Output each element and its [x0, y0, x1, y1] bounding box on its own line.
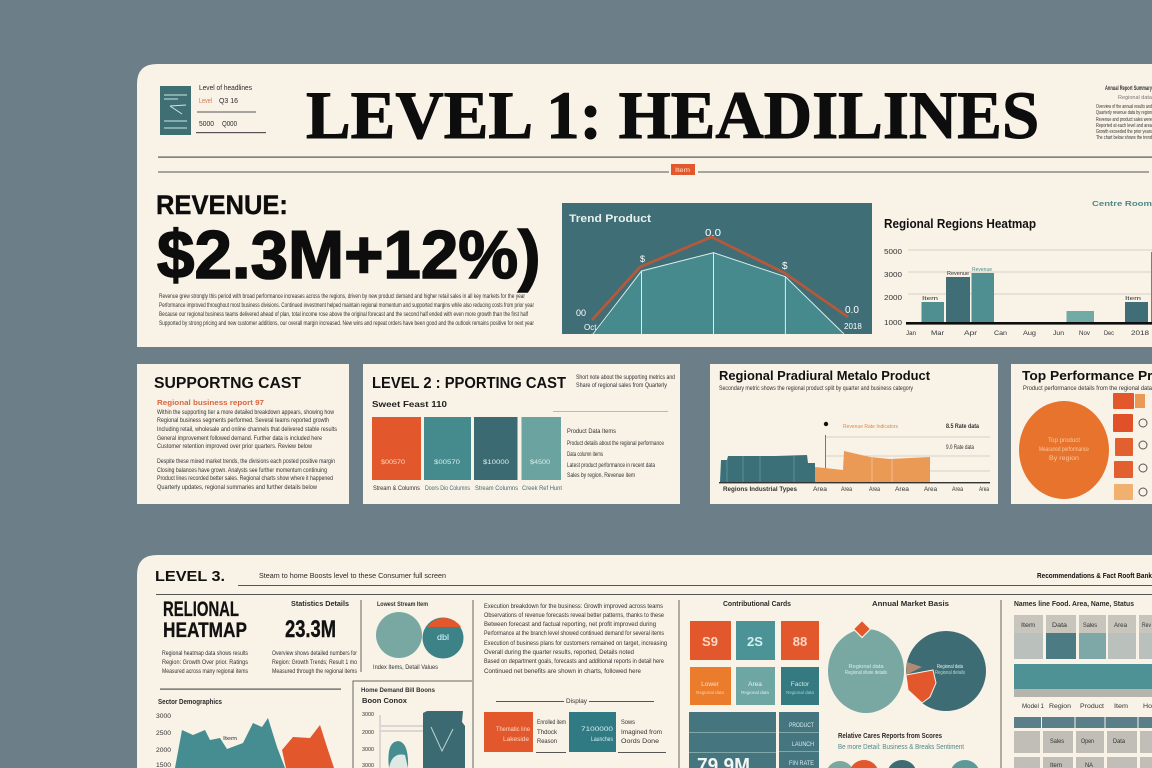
body copy [157, 409, 337, 491]
heat table: Model 1 [1022, 703, 1045, 710]
panel: level 3 [137, 555, 1152, 768]
chart: circles [373, 601, 464, 671]
body copy: Within the supporting tier a more detailed breakdown appears, showing how [157, 409, 334, 416]
subheading: Sweet Feast 110 [372, 399, 447, 409]
chart: circles: Index Items, Detail Values [373, 664, 438, 671]
relative cares heading and circles: Relative Cares Reports from Scores [838, 733, 942, 740]
relative cares heading and circles [826, 733, 980, 768]
chart: regional bars: 3000 [884, 272, 902, 279]
note: Short note about the supporting metrics and [576, 374, 675, 381]
side list: Latest product performance in recent data [567, 462, 655, 469]
heat table: Open [1081, 738, 1094, 745]
chart: trend product: 00 [576, 308, 586, 318]
colour swatches [372, 417, 562, 492]
chart: inset box: 3000 [362, 747, 374, 753]
chart: regional bars: Apr [964, 330, 977, 337]
chart: inset box: Boon Conox [362, 698, 407, 705]
display strip: 7100000 [581, 726, 613, 733]
chart: annual circles: Regional data [848, 664, 884, 670]
heading: SUPPORTNG CAST [154, 375, 302, 392]
chart: regional bars [884, 199, 1152, 337]
chart: orange circle [1019, 401, 1109, 499]
chart: regional bars: Jun [1053, 330, 1065, 337]
masthead details: 5000 [199, 121, 214, 128]
masthead details [196, 85, 266, 133]
display strip: Thdock [537, 729, 558, 736]
chart: regional bars: 2000 [884, 295, 902, 302]
chart: regional bars: Mar [931, 330, 944, 337]
chart: area regions: Sector Demographics [158, 699, 222, 706]
chart: area comparison: Area [924, 486, 938, 493]
colour swatches: $00570 [381, 459, 405, 466]
side note top right [1096, 85, 1152, 141]
chart: area comparison: Area [813, 486, 828, 493]
chart: annual circles: Regional details [935, 670, 965, 676]
metric tiles: FIN RATE [789, 761, 814, 767]
chart: regional bars: Item [922, 296, 938, 302]
display strip: Imagined from [621, 729, 662, 736]
side list: Data column items [567, 451, 603, 458]
chart: trend product: $ [640, 254, 645, 264]
revenue description: Supported by strong pricing and new customer additions, our overall margin increased. New wins and repeat orders have been good and the outlook remains positive for next year [159, 320, 534, 327]
metric tiles: Factor [791, 681, 810, 688]
chart: regional bars: Regional Regions Heatmap [884, 217, 1036, 231]
chart: area comparison: Area [895, 486, 910, 493]
metric tiles: LAUNCH [792, 742, 814, 748]
display strip: Reason [537, 738, 558, 745]
body copy: Quarterly updates, regional summaries and further details below [157, 484, 317, 491]
body copy: Customer retention improved over prior quarters. Review below [157, 443, 312, 450]
metric tiles: Lower [701, 681, 720, 688]
middle text block: Performance at the branch level showed continued demand for several items [484, 630, 664, 637]
chart: area comparison: Area [952, 486, 963, 493]
metric tiles: Contributional Cards [723, 601, 791, 608]
side list: Product Data Items [567, 428, 616, 435]
chart: trend product: 0.0 [845, 305, 859, 316]
middle text block: Based on department goals, forecasts and additional reports in detail here [484, 658, 664, 665]
chart: trend product: 2018 [844, 322, 862, 331]
chart: regional bars: Revenue [947, 271, 969, 277]
chart: inset box: 2000 [362, 730, 374, 736]
chart: regional bars: Can [994, 330, 1008, 337]
header rules and orange tag [158, 156, 1152, 175]
heat table: Product [1080, 703, 1104, 710]
small text columns: Overview shows detailed numbers for [272, 650, 357, 657]
small text columns: Measured across many regional items [162, 668, 248, 675]
chart: regional bars: Centre Room [1092, 199, 1152, 208]
statistic [285, 601, 349, 643]
statistic: 23.3M [285, 616, 336, 643]
body copy: Regional business segments performed. Several teams reported growth [157, 417, 329, 424]
note [576, 374, 675, 389]
heat table: Sales [1083, 622, 1097, 629]
side note top right: Regional data [1118, 95, 1152, 101]
metric tiles: Area [748, 681, 762, 688]
metric tiles: 2S [747, 634, 763, 649]
heading: Regional Pradiural Metalo Product [719, 369, 931, 383]
heat table: Ho [1143, 703, 1152, 710]
middle text block: Execution of business plans for customers remained on target, increasing [484, 640, 668, 647]
panel: regional metals product [710, 364, 998, 504]
revenue label: REVENUE: [156, 189, 288, 220]
side list: Product details about the regional performance [567, 440, 664, 447]
masthead details: Level [199, 98, 212, 105]
chart: area comparison: Area [841, 486, 852, 493]
regional heatmap heading [163, 598, 247, 642]
chart: inset box [353, 681, 472, 768]
chart: area regions: 2500 [156, 730, 172, 737]
body copy: Including retail, wholesale and online channels that delivered stable results [157, 426, 337, 433]
display strip: Lakeside [503, 736, 529, 743]
chart: inset box: Home Demand Bill Boons [361, 687, 436, 694]
chart: area regions [156, 688, 341, 768]
middle text block: Observations of revenue forecasts reveal better patterns, thanks to these [484, 612, 665, 619]
chart: area regions: 2000 [156, 747, 172, 754]
middle text block: Continued net benefits are shown in charts, followed here [484, 668, 642, 675]
chart: circles: Lowest Stream Item [377, 601, 428, 608]
metric tiles: Regional data [786, 690, 814, 695]
chart: area comparison: 9.0 Rate data [946, 444, 974, 451]
display strip: Thematic line [496, 726, 530, 733]
heading: LEVEL 2 : PPORTING CAST [372, 375, 567, 392]
panel: level 1 headlines [137, 64, 1152, 347]
chart: regional bars: Revenue [972, 267, 992, 273]
small text columns [162, 650, 357, 675]
side list [567, 428, 664, 479]
chart: area comparison [719, 422, 990, 493]
note: Share of regional sales from Quarterly [576, 382, 668, 389]
heat table: Item [1021, 622, 1035, 629]
chart: orange circle: Measured performance [1039, 447, 1090, 453]
chart: regional bars: 5000 [884, 249, 902, 256]
small text columns: Region: Growth Trends; Result 1 mo [272, 659, 357, 666]
display strip: Sows [621, 719, 635, 726]
colour swatches: $4500 [530, 459, 550, 466]
chart: regional bars: Item [1125, 296, 1141, 302]
chart: annual circles: Regional data [937, 664, 963, 670]
chart: regional bars: 1000 [884, 320, 902, 327]
chart: orange circle: Top product [1048, 438, 1080, 444]
chart: trend product: Trend Product [569, 213, 651, 225]
revenue description: Revenue grew strongly this period with broad performance increases across the regions, driven by new product demand and higher retail sales in all key markets for the year [159, 293, 525, 300]
chart: regional bars: Nov [1079, 330, 1091, 337]
section heading: LEVEL 3. [155, 568, 225, 585]
display strip [484, 698, 666, 752]
colour swatches: Stream & Columns [373, 485, 420, 492]
metric tiles: 88 [793, 634, 807, 649]
chart: trend product [562, 203, 872, 334]
middle text block: Overall during the quarter results, reported, Details noted [484, 649, 635, 656]
chart: circles: dbl [437, 633, 449, 642]
heat table: Data [1052, 622, 1068, 629]
icon: teal document [160, 86, 191, 135]
chart: area comparison: Regions Industrial Types [723, 486, 798, 493]
subheading: Secondary metric shows the regional product split by quarter and business category [719, 385, 914, 392]
chart: annual circles: Annual Market Basis [872, 601, 949, 608]
middle text block: Execution breakdown for the business: Growth improved across teams [484, 603, 663, 610]
chart: trend product: Oct [584, 323, 597, 332]
chart: area comparison: Area [869, 486, 880, 493]
heat table: Names line Food. Area, Name, Status [1014, 601, 1134, 608]
display strip: Oords Done [621, 738, 660, 745]
masthead details: Level of headlines [199, 85, 252, 92]
chart: trend product: $ [782, 261, 788, 272]
title: LEVEL 1: HEADILINES [306, 78, 1039, 153]
heat table: Area [1114, 622, 1128, 629]
middle text block [484, 603, 668, 675]
side list: Sales by region, Revenue item [567, 472, 635, 479]
chart: area comparison: Revenue Rate Indicators [843, 424, 898, 430]
body copy: Closing balances have grown. Analysts see further momentum continuing [157, 467, 327, 474]
chart: orange circle: By region [1049, 456, 1079, 462]
colour swatches: $00570 [434, 459, 460, 466]
display strip: Display [566, 698, 588, 705]
revenue description: Performance improved throughout most business divisions. Continued investment helped maintain regional momentum and supported margins while also reducing costs from prior year [159, 302, 534, 309]
small text columns: Region: Growth Over prior. Ratings [162, 659, 248, 666]
chart: inset box: 3000 [362, 712, 374, 718]
metric tiles: Regional data [741, 690, 769, 695]
panel: level 2 supporting cast [363, 364, 680, 504]
heat table [1014, 601, 1152, 768]
body copy: Despite these mixed market trends, the divisions each posted positive margin [157, 458, 335, 465]
heat table: Item [1114, 703, 1128, 710]
revenue description [159, 293, 534, 327]
heat table: Sales [1050, 738, 1064, 745]
display strip: Enrolled item [537, 719, 566, 726]
statistic: Statistics Details [291, 601, 349, 608]
metric tiles: S9 [702, 634, 718, 649]
header rules and orange tag: Item [675, 168, 690, 174]
body copy: General improvement followed demand. Further data is included here [157, 435, 322, 442]
chart: area regions: 3000 [156, 713, 172, 720]
chart: area regions: Item [223, 736, 237, 742]
colour swatches: Stream Columns [475, 485, 518, 492]
small text columns: Regional heatmap data shows results [162, 650, 248, 657]
colour swatches: $10000 [483, 459, 509, 466]
masthead details: Q000 [222, 121, 237, 128]
chart: annual circles [828, 601, 986, 713]
orange subheading: Regional business report 97 [157, 398, 264, 407]
heat table: Data [1113, 738, 1126, 745]
regional heatmap heading: HEATMAP [163, 619, 247, 642]
chart: area comparison: Area [979, 486, 989, 493]
chart: regional bars: Dec [1104, 330, 1114, 337]
metric tiles: Regional data [696, 690, 724, 695]
chart: area comparison: 8.5 Rate data [946, 423, 979, 430]
relative cares heading and circles: Be more Detail: Business & Breaks Sentiment [838, 744, 964, 751]
section note: Steam to home Boosts level to these Consumer full screen [259, 573, 446, 580]
chart: regional bars: 2018 [1131, 330, 1150, 337]
heat table: Region [1049, 703, 1072, 710]
panel: top performance product [1011, 364, 1152, 504]
chart: annual circles: Regional share details [845, 670, 887, 676]
regional heatmap heading: RELIONAL [163, 598, 239, 621]
display strip: Launches [591, 736, 614, 743]
small text columns: Measured through the regional items [272, 668, 357, 675]
revenue figure: $2.3M+12%) [157, 218, 541, 293]
chart: regional bars: Jan [906, 330, 917, 337]
metric tiles [689, 601, 819, 768]
chart: trend product: 0.0 [705, 228, 721, 239]
masthead details: Q3 16 [219, 98, 238, 105]
middle text block: Between forecast and factual reporting, net profit improved during [484, 621, 657, 628]
colour swatches: Doors Dio Columns [425, 485, 470, 492]
body copy: Product lines recorded better sales. Regional charts show where it happened [157, 475, 333, 482]
ranked squares [1113, 393, 1147, 500]
colour swatches: Creek Ref Hunt [522, 485, 562, 492]
chart: regional bars: Aug [1023, 330, 1037, 337]
panel: supporting cast [137, 364, 349, 504]
metric tiles: PRODUCT [789, 723, 814, 729]
revenue description: Because our regional business teams delivered ahead of plan, total income rose above the original forecast and the second half ended with even more growth than the first half [159, 311, 528, 318]
